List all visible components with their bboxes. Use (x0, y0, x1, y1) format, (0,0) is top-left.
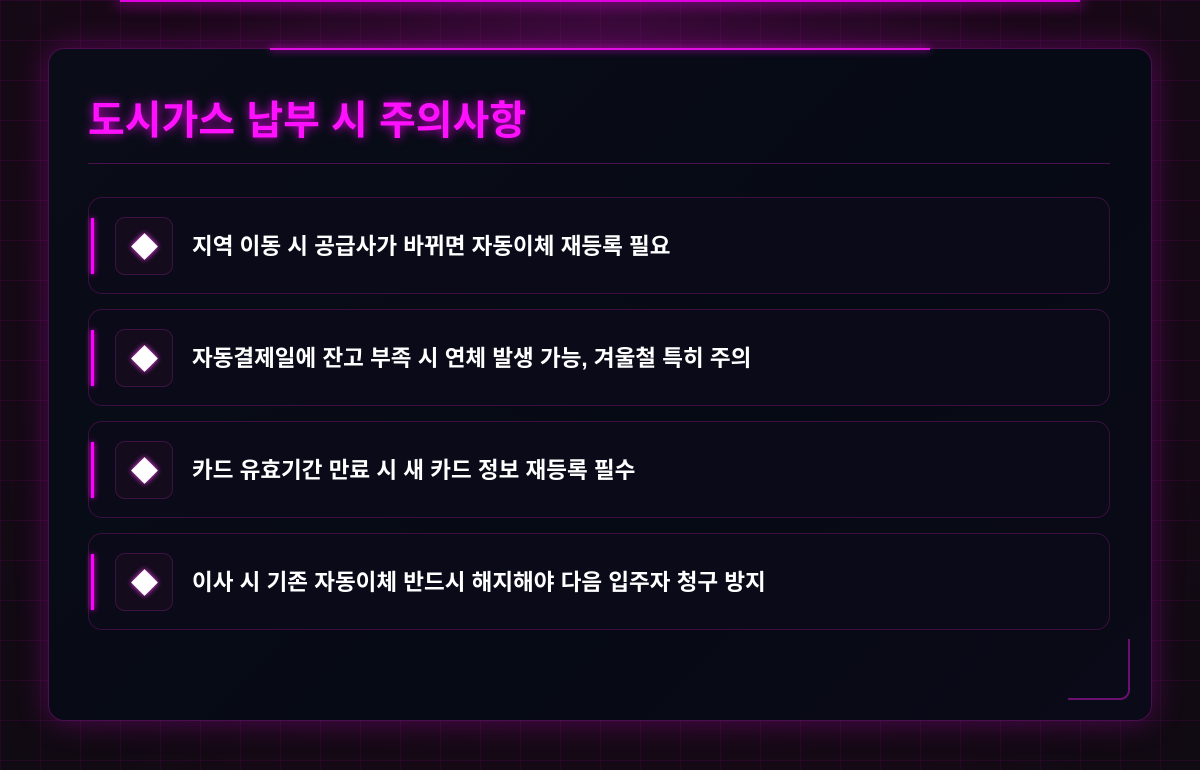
icon: diamond (115, 441, 173, 499)
item 3 (88, 421, 1110, 518)
icon: diamond (115, 329, 173, 387)
text: 이사 시 기존 자동이체 반드시 해지해야 다음 입주자 청구 방지 (192, 570, 766, 595)
item 4 (88, 533, 1110, 630)
title: 도시가스 납부 시 주의사항 (88, 99, 526, 143)
item 1 (88, 197, 1110, 294)
text: 자동결제일에 잔고 부족 시 연체 발생 가능, 겨울철 특히 주의 (192, 346, 751, 371)
item 2 (88, 309, 1110, 406)
icon: diamond (115, 217, 173, 275)
icon: diamond (115, 553, 173, 611)
text: 지역 이동 시 공급사가 바뀌면 자동이체 재등록 필요 (192, 234, 670, 259)
text: 카드 유효기간 만료 시 새 카드 정보 재등록 필수 (192, 458, 635, 483)
